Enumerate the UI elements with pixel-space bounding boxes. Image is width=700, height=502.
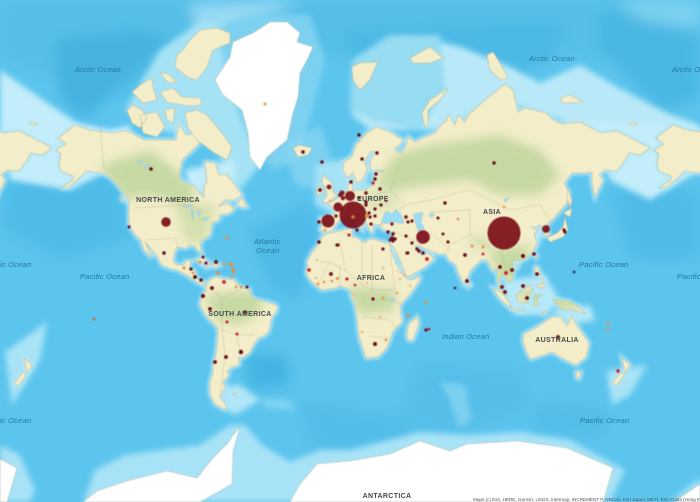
arctic shelf bbox=[352, 40, 700, 150]
small dark markers bbox=[128, 133, 576, 364]
lakes and inland seas bbox=[137, 160, 510, 303]
orange markers bbox=[92, 102, 609, 341]
map data: circle markers bbox=[92, 102, 620, 373]
land masses bbox=[0, 28, 700, 409]
land halo shelf bbox=[56, 84, 650, 409]
ocean labels: Ocean bbox=[256, 246, 279, 255]
pale markers bbox=[315, 200, 411, 333]
ocean labels: Arctic Ocean bbox=[528, 54, 575, 63]
country borders bbox=[100, 125, 552, 395]
ocean labels: Indian Ocean bbox=[442, 332, 490, 341]
ocean labels: Arctic Ocean bbox=[74, 65, 121, 74]
continent labels: ASIA bbox=[483, 209, 501, 216]
continent labels: NORTH AMERICA bbox=[136, 197, 200, 204]
continent labels: EUROPE bbox=[357, 196, 389, 203]
continent labels: AUSTRALIA bbox=[535, 337, 579, 344]
continent labels: AFRICA bbox=[357, 275, 385, 282]
ocean labels: Pacific Ocean bbox=[580, 416, 629, 425]
ocean labels: Pacific Ocean bbox=[579, 260, 628, 269]
vegetation bbox=[100, 135, 590, 325]
ocean labels: Atlantic bbox=[253, 237, 281, 246]
ocean labels bbox=[0, 54, 700, 425]
red markers bbox=[222, 181, 620, 373]
large country markers bbox=[161, 185, 550, 250]
antarctica bbox=[0, 426, 700, 502]
ocean labels: Pacific Ocean bbox=[80, 272, 129, 281]
continent labels: ANTARCTICA bbox=[363, 493, 411, 500]
arctic and northern islands bbox=[29, 28, 637, 396]
continent labels bbox=[136, 196, 579, 500]
continent labels: SOUTH AMERICA bbox=[208, 311, 272, 318]
greenland bbox=[215, 22, 313, 170]
